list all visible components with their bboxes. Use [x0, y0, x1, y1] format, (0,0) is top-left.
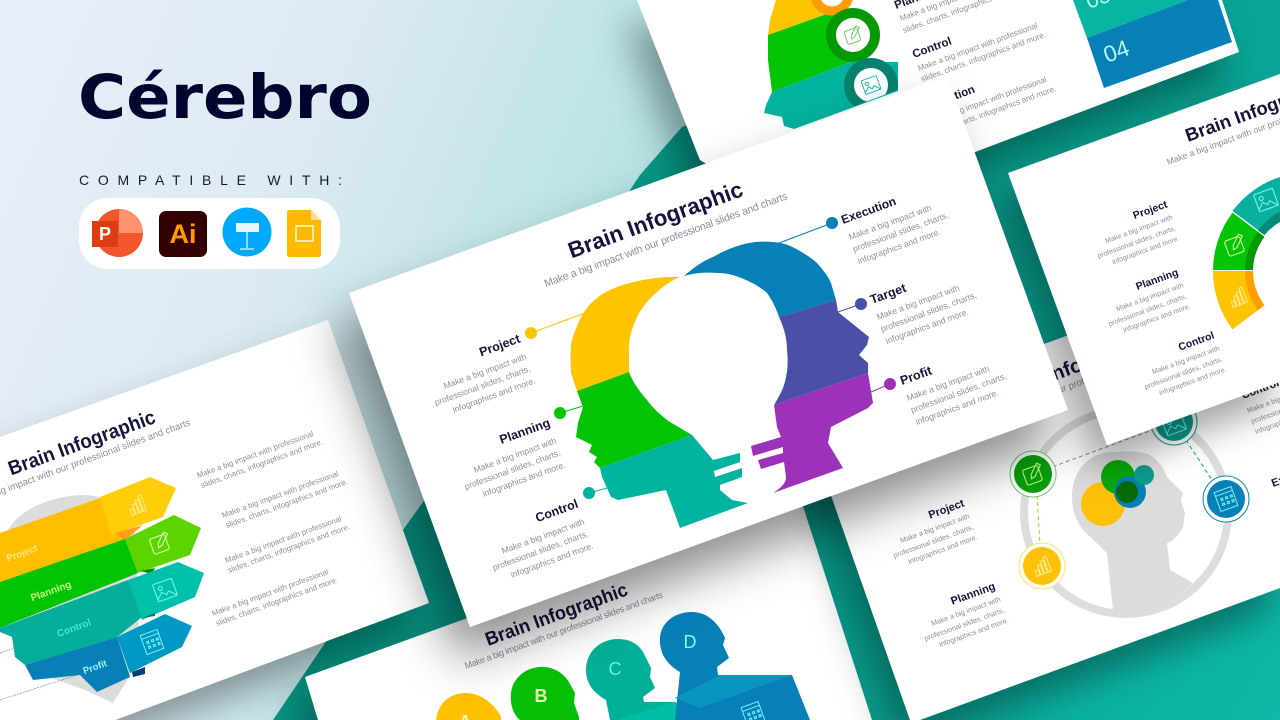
- icon: Illustrator: [159, 211, 207, 257]
- upper slide texts: [893, 0, 1057, 138]
- label: Execution: [839, 194, 950, 266]
- node: green: [1010, 451, 1056, 497]
- head segment: indigo: [774, 300, 869, 405]
- arrow descriptions: Make a big impact with professional: [196, 429, 315, 480]
- head letters: [458, 632, 696, 720]
- slide: centre brain infographic: [349, 76, 1068, 627]
- upper slide texts: Make a big impact with professional: [926, 75, 1048, 127]
- right slide labels: Project: [1131, 198, 1169, 222]
- slide: lower right circle head: [808, 258, 1280, 720]
- label: Target: professional slides, charts,: [879, 290, 978, 334]
- labels right: [1240, 377, 1280, 490]
- right slide labels: infographics and more.: [1158, 366, 1228, 397]
- label: Control: [491, 497, 595, 580]
- upper slide texts: Control: [911, 36, 953, 61]
- right slide labels: infographics and more.: [1111, 235, 1181, 266]
- brain circles: [1081, 460, 1154, 526]
- label: Profit: infographics and more.: [914, 388, 1000, 427]
- label: Execution: Execution: [839, 194, 898, 227]
- teal backdrop bands: [273, 0, 1280, 720]
- head letters: C: [608, 659, 622, 679]
- ring: green with icon: [831, 13, 875, 57]
- teal arrow: Control: [0, 562, 204, 665]
- labels left: [892, 497, 1010, 649]
- head C: [586, 639, 701, 720]
- slide title: Brain Infographic: [483, 580, 631, 651]
- compatible with heading: COMPATIBLE WITH:: [79, 172, 342, 188]
- connector lines: [531, 223, 890, 493]
- arrow descriptions: slides, charts, infographics and more.: [225, 477, 349, 530]
- right slide labels: Make a big impact with: [1151, 345, 1221, 376]
- slide: upper head with circles: [612, 0, 1239, 186]
- label: Target: [868, 281, 978, 346]
- right slide labels: Planning: [1134, 267, 1180, 293]
- upper slide texts: slides, charts, infographics and more.: [930, 84, 1057, 138]
- grey head: [1072, 451, 1193, 611]
- icon: Keynote: [222, 208, 272, 256]
- slide subtitle: Make a big impact with our professional slides and charts: [543, 190, 789, 290]
- right slide labels: [1097, 198, 1228, 397]
- icon: PowerPoint: P: [99, 224, 111, 244]
- upper slide texts: slides, charts, infographics and more.: [920, 30, 1047, 84]
- label: Project: infographics and more.: [451, 375, 537, 415]
- labels left: infographics and more.: [938, 615, 1010, 649]
- slide subtitle: Make a big impact with our professional slides and charts: [463, 589, 664, 671]
- label: Project: [433, 331, 537, 415]
- arrow descriptions: Make a big impact with professional: [211, 567, 330, 618]
- upper slide texts: Execution: [921, 84, 977, 114]
- labels right: Control: [1240, 377, 1280, 402]
- arrow descriptions: slides, charts, infographics and more.: [200, 437, 324, 490]
- software icons pill: [79, 198, 340, 269]
- block: 03: [1073, 0, 1188, 38]
- head segment: yellow: [571, 277, 680, 391]
- slide title: Brain Infographic: [990, 329, 1153, 407]
- label: Planning: [463, 416, 567, 499]
- icon: Illustrator: Ai: [170, 219, 196, 249]
- head segment: teal: [600, 435, 748, 528]
- blue arrow: Profit: Profit: [82, 658, 109, 677]
- label: Execution: professional slides, charts,: [851, 210, 950, 254]
- upper slide texts: Make a big impact with professional: [917, 21, 1039, 73]
- slide subtitle: Make a big impact with our professional slides: [958, 355, 1144, 432]
- blue arrow: Profit: [25, 614, 192, 692]
- slide: right semicircle: [1008, 74, 1280, 445]
- head bands: [764, 0, 898, 129]
- label: Profit: professional slides, charts,: [909, 371, 1008, 415]
- ring: teal with icon: [849, 63, 893, 107]
- ring around head: [1024, 410, 1228, 614]
- teal box top: [617, 702, 701, 720]
- right slide labels: Make a big impact with: [1115, 282, 1185, 313]
- green arrow: Planning: Planning: [29, 579, 73, 604]
- label: Target: Target: [868, 281, 909, 307]
- label: Project: professional slides, charts,: [433, 363, 532, 408]
- head segment: purple: [751, 373, 873, 493]
- label: Planning: Planning: [498, 416, 552, 447]
- slide title: Brain Infographic: [5, 407, 159, 480]
- right slide labels: professional slides, charts,: [1108, 293, 1188, 328]
- ring segment: green: [1213, 213, 1264, 270]
- labels left: Project: [927, 497, 966, 522]
- grey head behind arrows: [8, 495, 140, 703]
- head letters: B: [534, 686, 548, 706]
- label: Execution: Make a big impact with: [847, 203, 933, 242]
- right slide labels: professional slides, charts,: [1144, 356, 1224, 391]
- label: Planning: professional slides, charts,: [463, 447, 562, 492]
- dashed connectors: [1033, 422, 1212, 545]
- slide: left arrows brain: [0, 320, 429, 720]
- head segment: green: [576, 372, 692, 468]
- right slide labels: infographics and more.: [1122, 303, 1192, 334]
- icon: Google Slides: [287, 210, 321, 257]
- arrow descriptions: [196, 429, 351, 628]
- label: Target: Make a big impact with: [875, 283, 961, 322]
- head segment: blue: [684, 242, 836, 317]
- head B: [511, 667, 579, 720]
- labels left: infographics and more.: [907, 532, 979, 566]
- block: 04: [1087, 0, 1232, 88]
- label: Profit: Profit: [898, 363, 934, 388]
- arrow descriptions: slides, charts, infographics and more.: [227, 522, 351, 575]
- arrow descriptions: Make a big impact with professional: [221, 469, 340, 520]
- node: blue: [1203, 476, 1249, 522]
- label: Planning: infographics and more.: [481, 459, 567, 499]
- icon: qr on box: [741, 702, 765, 720]
- icon: PowerPoint: [92, 209, 143, 257]
- yellow arrow: Project: [0, 477, 176, 582]
- node: yellow: [1019, 543, 1065, 589]
- labels left: professional slides, charts,: [923, 605, 1006, 643]
- green arrow: Planning: [0, 515, 201, 628]
- ring segment: teal: [1232, 176, 1280, 235]
- label: Profit: Make a big impact with: [905, 364, 991, 403]
- ring segment: yellow: [1213, 271, 1264, 329]
- dots: [525, 217, 896, 499]
- arrow descriptions: slides, charts, infographics and more.: [215, 575, 339, 628]
- right slide labels: Control: [1177, 330, 1216, 354]
- slide title: Brain Infographic: [565, 177, 746, 263]
- right slide labels: Make a big impact with: [1104, 214, 1174, 245]
- label: Target: infographics and more.: [884, 307, 970, 346]
- labels left: Make a big impact with: [930, 594, 1002, 628]
- labels left: professional slides, charts,: [892, 522, 975, 560]
- block: 04: 04: [1100, 34, 1133, 68]
- ring: orange: [815, 0, 849, 11]
- label: Control: professional slides, charts,: [491, 528, 590, 573]
- label: Execution: infographics and more.: [856, 227, 942, 266]
- slide: lower centre heads: [305, 497, 872, 720]
- labels left: Make a big impact with: [899, 511, 971, 545]
- label: Planning: Make a big impact with: [472, 435, 558, 475]
- title: Cérebro: Cérebro: [78, 62, 372, 133]
- head A: [436, 693, 501, 720]
- label: Control: Control: [533, 497, 580, 525]
- node: teal: [1151, 399, 1197, 445]
- label: Profit: [898, 363, 1008, 427]
- arrow descriptions: Make a big impact with professional: [224, 514, 343, 565]
- head D with box: [660, 612, 810, 720]
- teal arrow: Control: Control: [56, 617, 93, 640]
- right slide labels: professional slides, charts,: [1097, 225, 1177, 260]
- label: Project: Make a big impact with: [442, 351, 528, 391]
- dashed guide lines: [0, 648, 77, 700]
- label: Control: Make a big impact with: [500, 516, 586, 556]
- label: Project: Project: [477, 331, 523, 359]
- head letters: D: [684, 632, 696, 652]
- labels left: Planning: [949, 581, 997, 608]
- label: Control: infographics and more.: [509, 540, 595, 580]
- yellow arrow: Project: Project: [5, 543, 40, 564]
